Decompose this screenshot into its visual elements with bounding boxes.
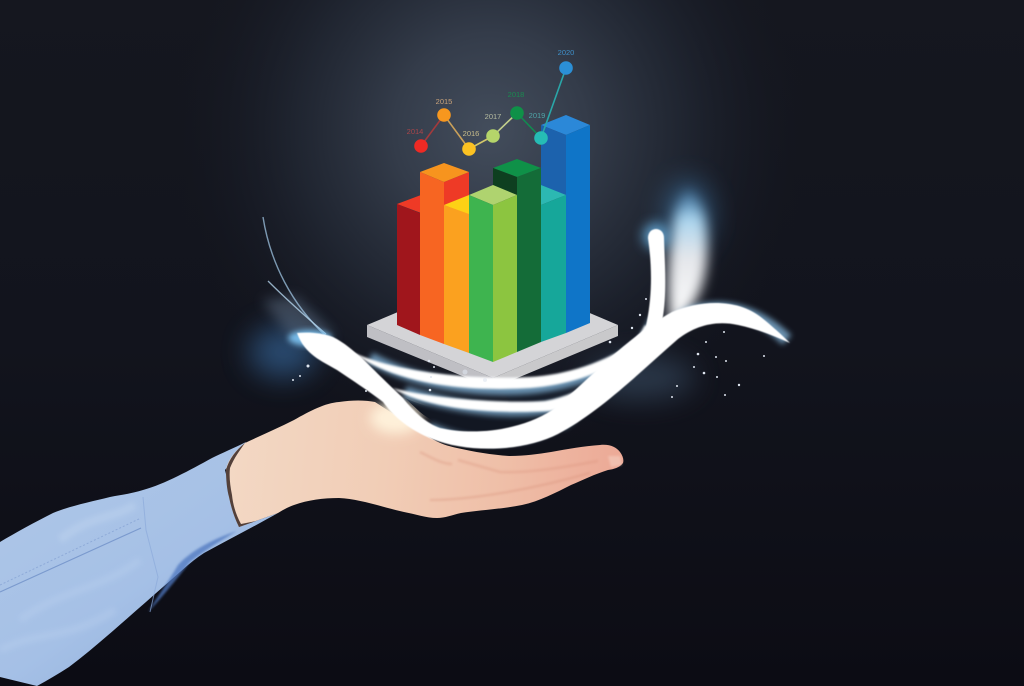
year labels: 2020: [558, 48, 574, 57]
trend line segments: [421, 68, 566, 149]
bar 2014 red: [397, 195, 444, 335]
vertical ribbon with glowing head: [632, 223, 669, 366]
year labels: 2015: [436, 97, 452, 106]
year labels: 2017: [485, 112, 501, 121]
bar 2018 dark green: [493, 159, 541, 352]
third ribbon: [392, 325, 653, 412]
bar 2017 green: [469, 185, 517, 362]
grey platform: [367, 272, 618, 384]
data points: [414, 61, 573, 156]
shirt sleeve: [0, 442, 278, 686]
rear blue glow behind light ribbons: [249, 181, 710, 400]
year labels: 2014: [407, 127, 423, 136]
year labels: 2016: [463, 129, 479, 138]
dark band behind ribbon strands: [405, 376, 585, 434]
vertical blurred plume: [668, 188, 707, 326]
hand: [226, 400, 623, 527]
arm with sleeve and open hand: [0, 400, 623, 686]
year labels: [407, 48, 574, 138]
year labels: 2018: [508, 90, 524, 99]
particles: [292, 298, 765, 398]
isometric bar chart with platform: [367, 115, 618, 384]
line chart with year labels: [407, 48, 574, 156]
year labels: 2019: [529, 111, 545, 120]
bar 2020 blue: [541, 115, 590, 333]
main ribbon: [297, 303, 790, 449]
bar 2015 orange: [420, 163, 469, 344]
soft blue ribbon halo: [370, 308, 787, 441]
swirling light ribbons: [262, 188, 790, 449]
bar 2019 teal: [541, 185, 566, 342]
second ribbon: [352, 320, 668, 389]
bar 2016 amber: [444, 195, 469, 353]
left plume and thin arcs: [262, 217, 336, 346]
